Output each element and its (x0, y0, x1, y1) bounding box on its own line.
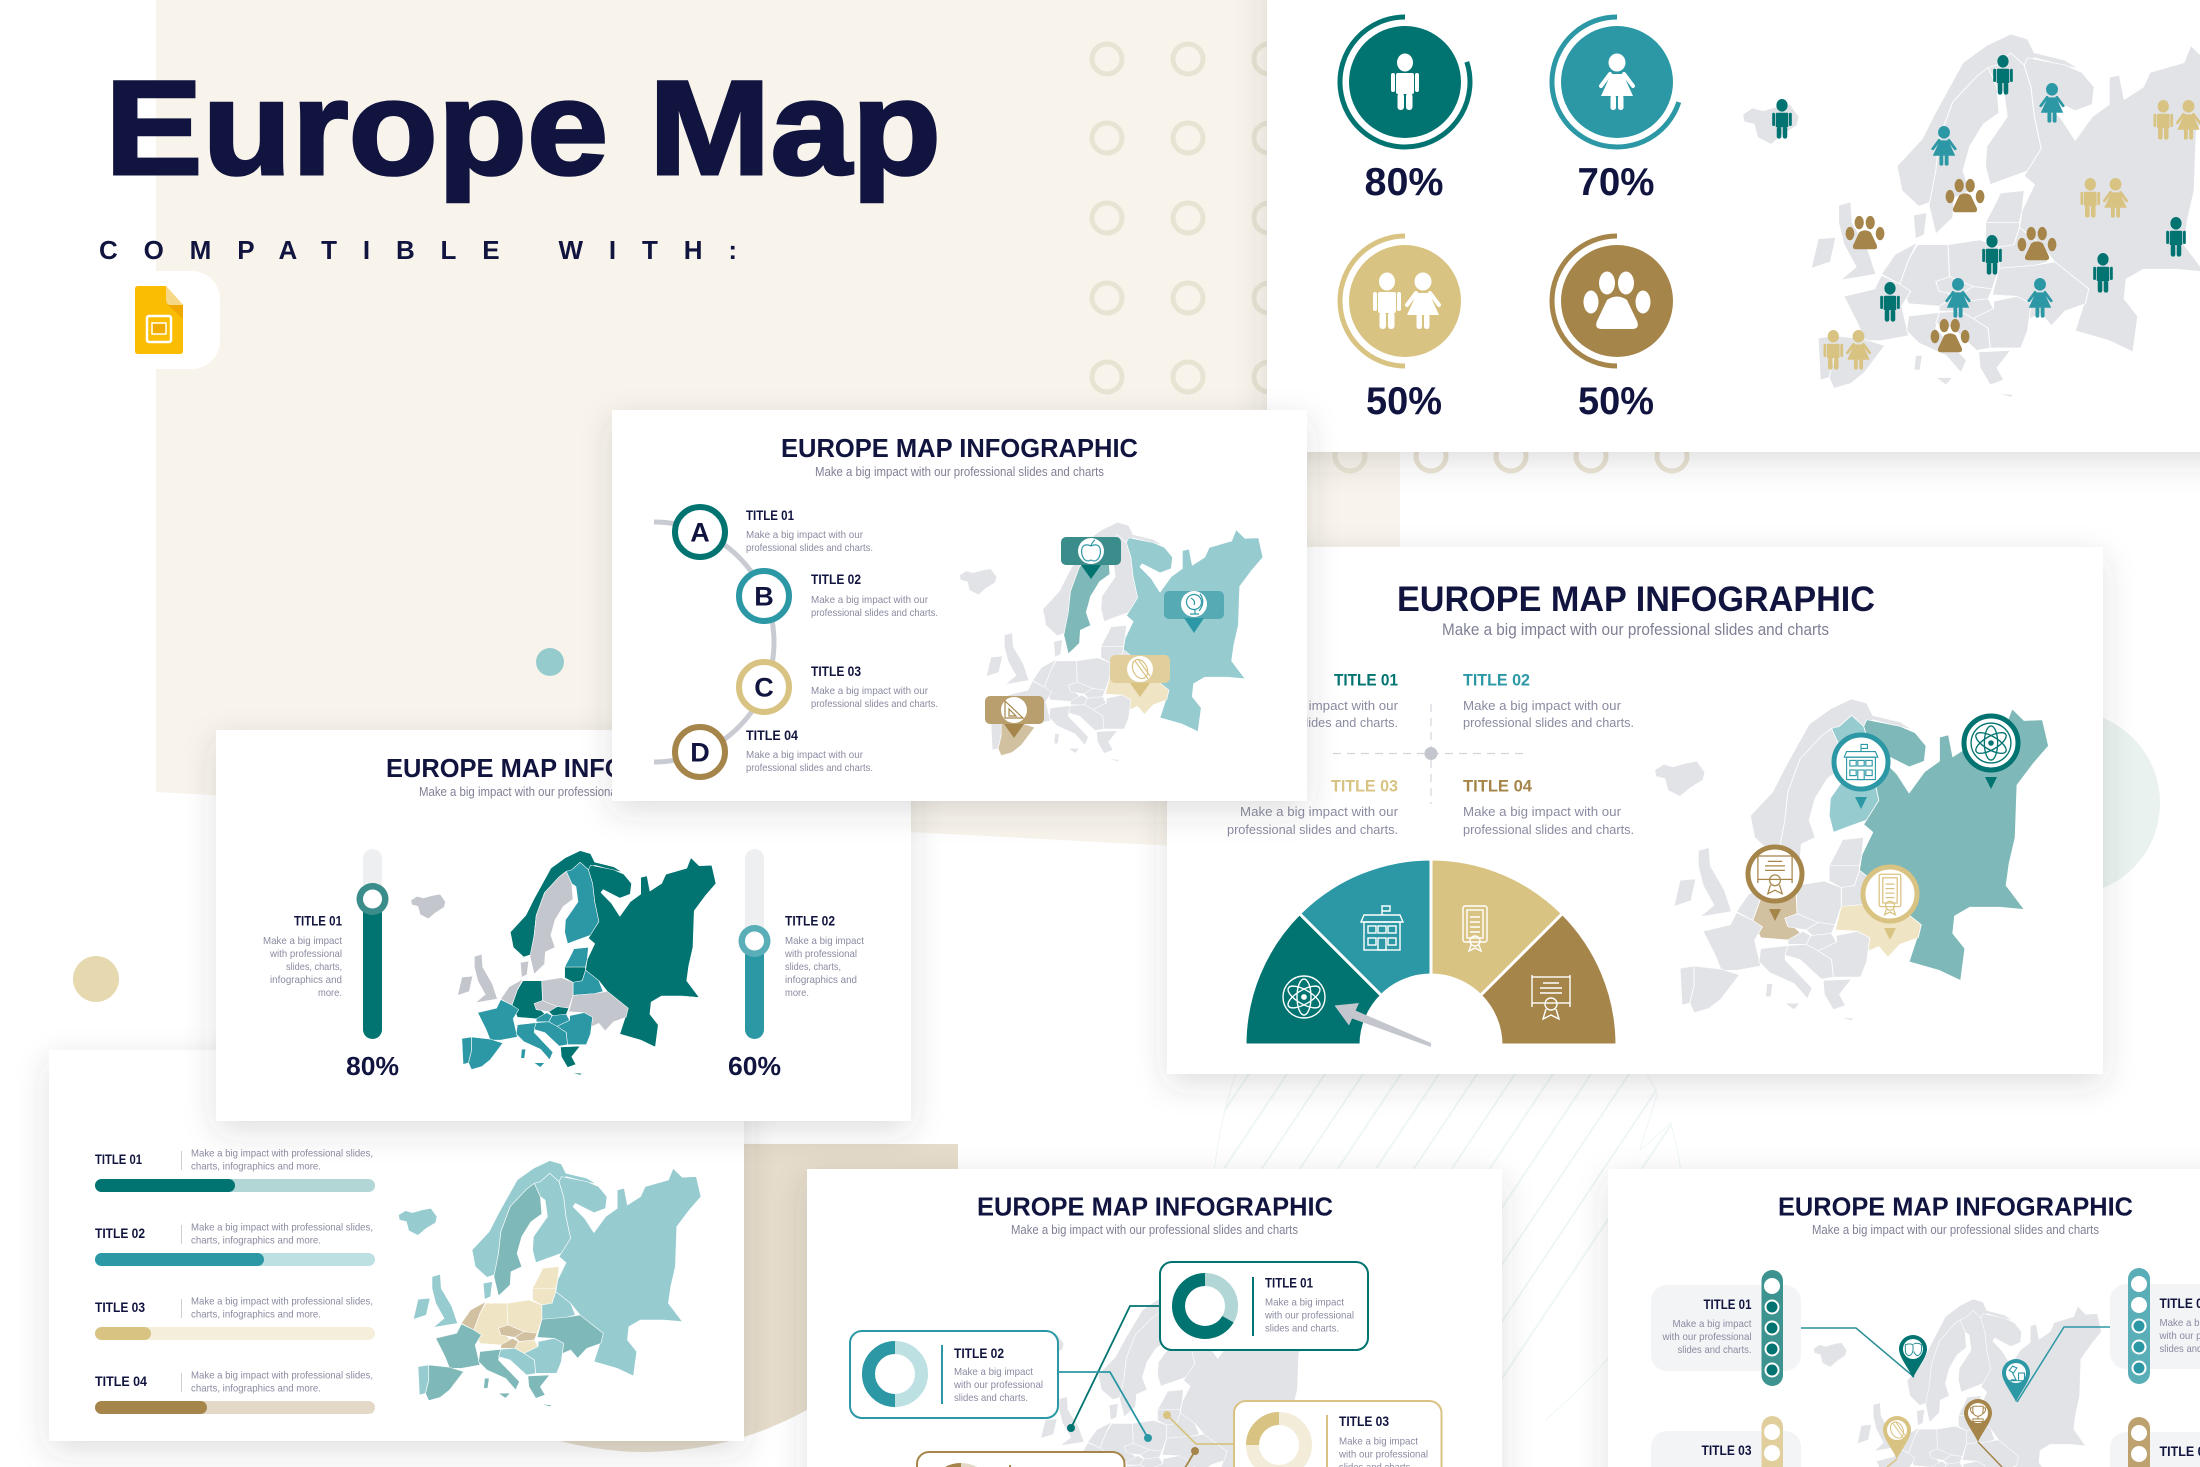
callout: title 02 donut (850, 1331, 1058, 1418)
text: title 02: professional slides and charts. (1463, 715, 1634, 730)
map: gray Europe (1026, 1292, 1323, 1467)
text: title 04: Make a big impact with our (1463, 804, 1622, 819)
text: title 01 (1227, 670, 1399, 730)
text: title 02: slides, charts, (785, 962, 841, 973)
map: gray Europe (1743, 34, 2200, 397)
step B (739, 571, 789, 621)
text: title 03: Make a big impact with our (1240, 804, 1399, 819)
callout: title 03 donut (1234, 1401, 1442, 1467)
panel: slide with sliders (216, 730, 911, 1121)
callout: title 02 donut: slides and charts. (954, 1393, 1028, 1404)
text: title 04 (746, 728, 873, 774)
text: title 03: Make a big impact with our (811, 686, 929, 697)
stat: 80% male (1340, 17, 1470, 204)
panel: slide with semicircle gauge (1167, 547, 2103, 1074)
row: title 03 bar: charts, infographics and more. (191, 1310, 321, 1320)
info card: title 01: TITLE 01 (1704, 1297, 1752, 1312)
icon: atom (1283, 976, 1325, 1018)
text: title 03: professional slides and charts. (811, 699, 938, 710)
connector: title 01 to UK (1067, 1306, 1160, 1432)
callout pin: palette (1110, 655, 1170, 697)
text: title 03: TITLE 03 (1331, 777, 1398, 796)
icon: Google Slides badge (120, 271, 220, 369)
marker: cross centre dot (1424, 747, 1438, 760)
text: title 01: TITLE 01 (1334, 670, 1398, 690)
text: title 04: Make a big impact with our (746, 750, 864, 761)
connector: title 01 (1801, 1328, 1914, 1377)
background: teal dot (536, 648, 564, 676)
subheading: Make a big impact with our professional slides and charts (1442, 621, 1829, 639)
connector: title 03 (1163, 1411, 1234, 1444)
text: title 01: with professional (269, 949, 342, 960)
callout: title 04 donut (917, 1452, 1124, 1467)
info card: title 01 (1651, 1270, 1801, 1386)
row: title 01 bar: charts, infographics and more. (191, 1162, 321, 1172)
panel: slide with percentage circles and markers (1267, 0, 2200, 452)
subheading: Make a big impact with our professional slides and charts (1812, 1223, 2099, 1237)
map: gray Europe (1814, 1299, 2101, 1467)
text: title 02: infographics and (785, 975, 857, 986)
text: title 02 (1463, 670, 1634, 730)
heading: EUROPE MAP INFOGRAPHIC (1397, 580, 1875, 619)
text: title 04: professional slides and charts. (1463, 822, 1634, 837)
step C (739, 662, 789, 712)
row: title 01 bar: TITLE 01 (95, 1152, 142, 1167)
row: title 02 bar: charts, infographics and more. (191, 1236, 321, 1246)
stat: 50% people (1340, 236, 1461, 423)
markers: people pairs (1824, 100, 2200, 370)
pin: scroll (1748, 847, 1802, 921)
heading: EUROPE MAP INFOGRAPHIC (977, 1194, 1333, 1222)
panel: slide with donut callouts (807, 1169, 1502, 1467)
background: leaf line pattern (1214, 1074, 1681, 1421)
markers: female figures (1933, 83, 2063, 318)
panel: slide with A B C D steps (612, 410, 1307, 801)
slider: 60%: 60% (728, 1051, 781, 1081)
stat: 70% female (1552, 17, 1679, 204)
text: title 01: more. (318, 988, 342, 999)
slider: 80%: 80% (346, 1051, 399, 1081)
text: title 02: with professional (784, 949, 857, 960)
map: highlighted countries (960, 522, 1263, 761)
row: title 03 bar: Make a big impact with professional slides, (191, 1296, 373, 1308)
stat: 80% male: 80% (1364, 161, 1444, 204)
text: title 01: TITLE 01 (294, 914, 342, 929)
text: title 01: professional slides and charts. (1227, 715, 1398, 730)
row: title 04 bar (95, 1370, 375, 1414)
background: tan dot (73, 956, 119, 1002)
text: title 02: more. (785, 988, 809, 999)
text: title 02: Make a big impact with our (1463, 698, 1622, 713)
icon: certificate (1463, 906, 1487, 951)
text: title 01: slides, charts, (286, 962, 342, 973)
text: title 02 (811, 572, 938, 619)
callout: title 02 donut: with our professional (953, 1380, 1043, 1391)
pin: masks (1899, 1335, 1927, 1378)
row: title 04 bar: charts, infographics and more. (191, 1384, 321, 1394)
row: title 02 bar (95, 1222, 375, 1266)
info card: title 04 (2110, 1417, 2200, 1467)
info card: title 01: slides and charts. (1678, 1345, 1752, 1356)
info card: title 01: Make a big impact (1672, 1319, 1752, 1330)
markers: paws (1846, 179, 2056, 352)
connector: title 02 to Germany (1058, 1372, 1152, 1442)
info card: title 01: with our professional (1662, 1332, 1752, 1343)
background: ring pattern (1092, 44, 1687, 471)
main title: Europe Map (105, 54, 941, 203)
connector: title 03 (1887, 1459, 1897, 1467)
callout: title 01 donut: with our professional (1264, 1310, 1354, 1322)
subheading: Make a big impact with our professional slides and charts (419, 785, 708, 799)
text: title 02 (784, 914, 864, 999)
text: title 03 (1227, 777, 1399, 837)
text: title 04: TITLE 04 (746, 728, 798, 743)
pin: certificate (1863, 867, 1917, 940)
step C: C (754, 672, 774, 702)
step D: D (690, 738, 710, 768)
row: title 03 bar (95, 1296, 375, 1340)
callout: title 01 donut: Make a big impact (1265, 1298, 1344, 1308)
arrow: gauge needle (1334, 1003, 1431, 1047)
subheading: Make a big impact with our professional slides and charts (815, 465, 1104, 479)
stat: 70% female: 70% (1578, 161, 1654, 204)
text: title 04: professional slides and charts. (746, 763, 873, 774)
background: pale green circle (1976, 711, 2160, 895)
text: title 01: Make a big impact with our (1240, 698, 1399, 713)
callout pin: globe (1164, 591, 1224, 633)
background: tan arc shape (560, 1144, 958, 1452)
text: title 02: TITLE 02 (785, 914, 835, 929)
heading: EUROPE MAP INFOGRAPHIC (386, 755, 742, 783)
map: gray with highlights (1655, 699, 2049, 1021)
stat: 50% paw: 50% (1578, 380, 1654, 423)
map: two-tone teal (411, 851, 716, 1075)
callout: title 01 donut: slides and charts. (1265, 1324, 1339, 1334)
connector: title 04 (1124, 1447, 1199, 1467)
stat: 50% paw (1552, 236, 1673, 423)
icon: scroll (1532, 975, 1570, 1019)
map: coloured by group (398, 1161, 701, 1407)
row: title 03 bar: TITLE 03 (95, 1300, 145, 1315)
background: beige panel (156, 0, 1400, 858)
heading: EUROPE MAP INFOGRAPHIC (781, 435, 1138, 463)
row: title 04 bar: Make a big impact with professional slides, (191, 1370, 373, 1382)
info card: title 02 (2110, 1268, 2200, 1384)
text: title 02: TITLE 02 (1463, 670, 1530, 690)
text: title 02: professional slides and charts. (811, 608, 938, 619)
text: title 03 (811, 664, 938, 710)
text: title 01: Make a big impact (263, 936, 342, 947)
callout: title 02 donut: TITLE 02 (954, 1346, 1004, 1361)
icon: building (1361, 906, 1403, 950)
row: title 01 bar (95, 1148, 375, 1192)
pin: building (1834, 735, 1888, 809)
pin: lamp (2002, 1359, 2030, 1402)
text: title 01 (746, 508, 873, 554)
markers: male figures (1772, 55, 2186, 322)
text: title 01: TITLE 01 (746, 508, 794, 523)
callout: title 03 donut: Make a big impact (1339, 1436, 1418, 1448)
callout: title 01 donut: TITLE 01 (1265, 1276, 1313, 1291)
slider: 80% (346, 849, 399, 1081)
slider: 60% (728, 849, 781, 1081)
text: title 02: TITLE 02 (811, 572, 861, 587)
heading: EUROPE MAP INFOGRAPHIC (1778, 1194, 2133, 1222)
chart: semicircle gauge (1245, 859, 1617, 1045)
text: title 02: Make a big impact (785, 936, 864, 947)
row: title 02 bar: Make a big impact with professional slides, (191, 1222, 373, 1234)
callout pin: apple (1061, 537, 1121, 579)
step B: B (754, 582, 774, 612)
connector: title 04 (1978, 1442, 2002, 1467)
panel: slide with pill indicators (1608, 1169, 2200, 1467)
step A (675, 507, 725, 557)
panel: slide with bars (49, 1050, 744, 1441)
step A: A (690, 518, 710, 548)
callout: title 02 donut: Make a big impact (954, 1367, 1033, 1378)
row: title 04 bar: TITLE 04 (95, 1374, 147, 1389)
row: title 02 bar: TITLE 02 (95, 1226, 145, 1241)
text: title 04: TITLE 04 (1463, 777, 1533, 796)
text: title 03: TITLE 03 (811, 664, 861, 679)
row: title 01 bar: Make a big impact with professional slides, (191, 1148, 373, 1160)
stat: 50% people: 50% (1366, 380, 1442, 423)
text: title 04 (1463, 777, 1634, 837)
text: title 03: professional slides and charts. (1227, 822, 1398, 837)
callout: title 03 donut: TITLE 03 (1339, 1414, 1389, 1429)
info card: title 03: TITLE 03 (1702, 1443, 1752, 1458)
text: title 01: infographics and (270, 975, 342, 986)
callout: title 03 donut: with our professional (1338, 1450, 1428, 1460)
compatible with label: COMPATIBLE WITH: (99, 235, 737, 265)
subheading: Make a big impact with our professional slides and charts (1011, 1223, 1298, 1237)
text: title 01: professional slides and charts. (746, 543, 873, 554)
callout: title 01 donut (1160, 1262, 1368, 1350)
text: title 02: Make a big impact with our (811, 595, 929, 606)
text: title 01 (263, 914, 342, 999)
step D (675, 727, 725, 777)
pin: trophy (1964, 1399, 1992, 1442)
pin: atom (1964, 716, 2018, 789)
info card: title 03 (1651, 1416, 1801, 1467)
connector: title 02 (2017, 1327, 2110, 1402)
pin: brush (1883, 1416, 1911, 1459)
text: title 01: Make a big impact with our (746, 530, 864, 541)
callout pin: ruler (985, 696, 1044, 738)
